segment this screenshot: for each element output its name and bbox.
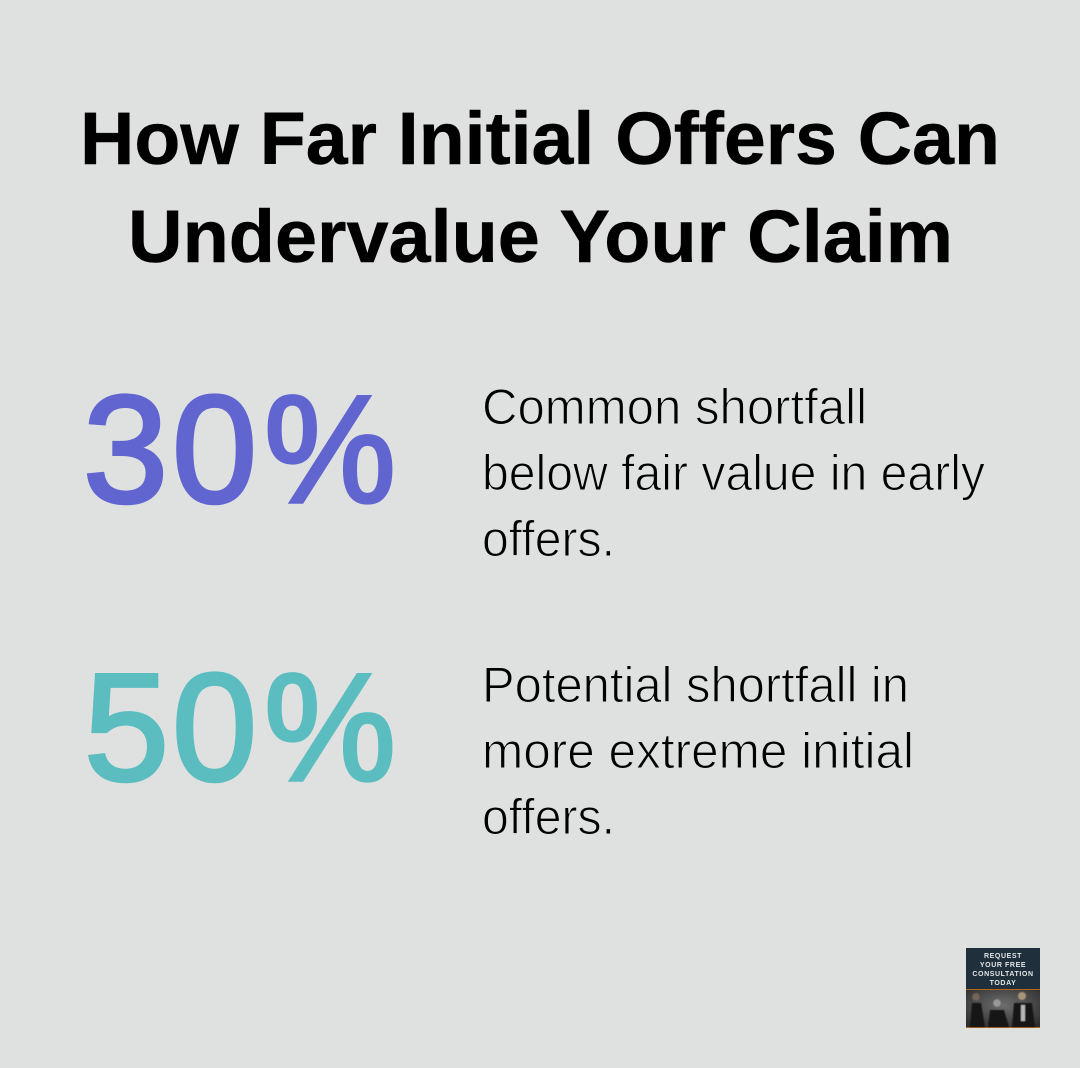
description: common shortfall: below fair value in early <box>482 445 985 501</box>
stat: 50%: % <box>264 642 396 813</box>
stat: 30% <box>83 364 396 535</box>
stat: 50% <box>84 642 396 813</box>
stat: 50%: 0 <box>172 642 257 813</box>
badge: request your free consultation: TODAY <box>990 980 1016 987</box>
stat: 30%: 0 <box>172 364 257 535</box>
description: potential shortfall: more extreme initial <box>482 723 914 779</box>
title <box>80 97 1000 278</box>
description: common shortfall: offers. <box>482 511 615 567</box>
description: potential shortfall <box>482 657 914 845</box>
stat: 30%: % <box>264 364 396 535</box>
description: potential shortfall: offers. <box>482 789 615 845</box>
badge: request your free consultation <box>966 948 1040 1028</box>
photo figures <box>970 992 1035 1027</box>
description: potential shortfall: Potential shortfall in <box>482 657 909 713</box>
description: common shortfall: Common shortfall <box>482 379 867 435</box>
title: Undervalue Your Claim <box>128 195 953 278</box>
stat: 50%: 5 <box>84 642 169 813</box>
description: common shortfall <box>482 379 985 567</box>
badge: request your free consultation: YOUR FREE <box>980 962 1026 969</box>
title: How Far Initial Offers Can <box>80 97 1000 180</box>
stat: 30%: 3 <box>83 364 168 535</box>
badge: request your free consultation: CONSULTATION <box>972 971 1034 978</box>
badge: request your free consultation: REQUEST <box>984 953 1022 960</box>
